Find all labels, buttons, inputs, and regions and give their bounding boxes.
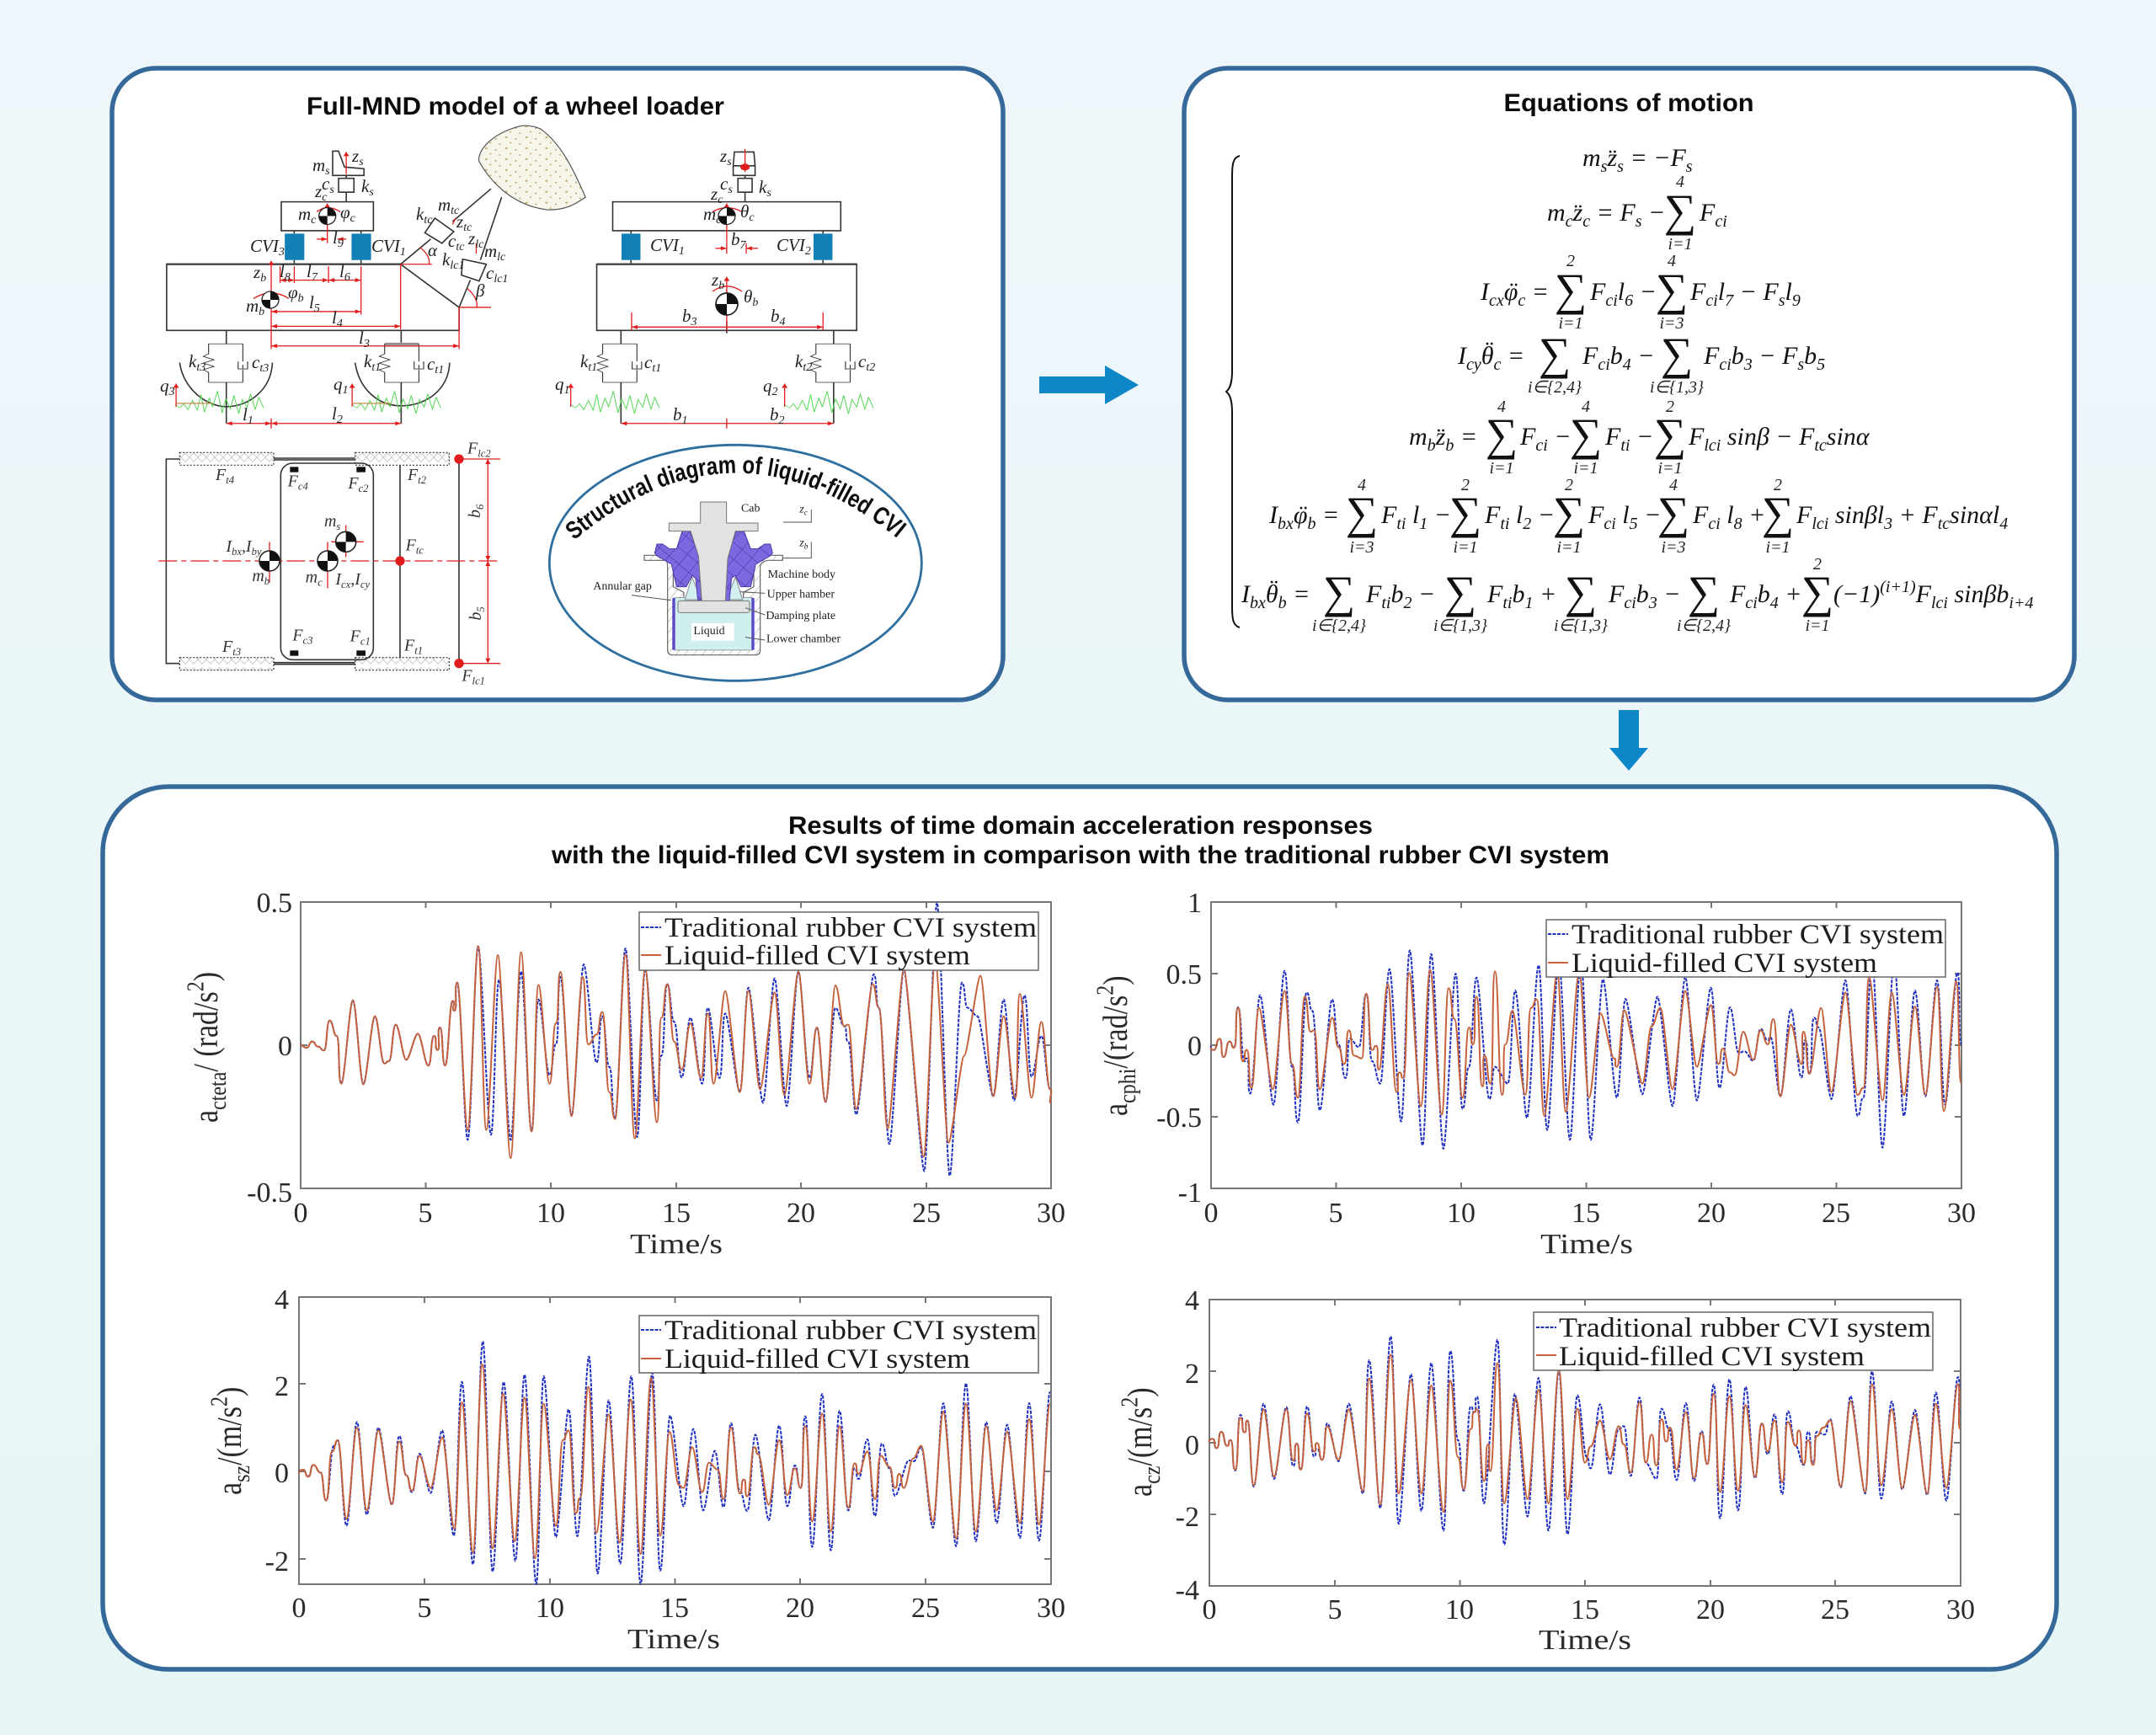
side view labels: φb: [288, 282, 304, 305]
axis tick labels: -4: [1176, 1575, 1199, 1606]
axis tick labels: 5: [1329, 1198, 1342, 1229]
plan view labels: Ft1: [403, 637, 423, 657]
axis tick labels: 0: [1203, 1594, 1216, 1626]
panel: full-MND model of a wheel loader: [109, 66, 1006, 702]
axis tick labels: [247, 888, 1065, 1260]
side view labels: kt1: [364, 351, 381, 374]
axis tick labels: 4: [1185, 1285, 1199, 1316]
rear view labels: ct2: [858, 351, 875, 374]
legend: [639, 912, 1038, 971]
side view labels: q1: [334, 374, 349, 397]
rear view labels: θc: [740, 201, 755, 224]
axis tick labels: 0.5: [256, 888, 292, 919]
heading: equations panel title: Equations of motion: [1504, 89, 1753, 117]
plan view labels: Ft4: [215, 466, 235, 486]
axis tick labels: 0: [1185, 1430, 1199, 1461]
equation system: ∑: [1801, 567, 1833, 617]
equation system: 4: [1676, 173, 1684, 191]
equation system: Icxφ¨c =: [1480, 278, 1549, 310]
rear view labels: q1: [555, 374, 569, 397]
axis tick labels: -0.5: [1156, 1102, 1202, 1134]
plan view labels: [215, 439, 491, 686]
axis tick labels: 0: [278, 1031, 292, 1062]
axes: [301, 902, 1051, 1188]
equation system: [1241, 144, 2033, 635]
CVI housing: [644, 555, 782, 655]
rear view labels: cs: [720, 174, 733, 196]
equation system: ∑: [1688, 567, 1720, 617]
equation system: mbz̈b =: [1409, 423, 1477, 455]
equation system: i=3: [1349, 538, 1374, 557]
side view labels: l4: [332, 307, 343, 330]
axis tick labels: 30: [1037, 1198, 1065, 1229]
axis tick labels: 15: [662, 1198, 691, 1229]
side view labels: zc: [314, 181, 328, 204]
side view labels: mb: [246, 296, 264, 318]
equation system: ∑: [1553, 488, 1585, 538]
axis tick labels: 10: [536, 1593, 564, 1624]
equation system: Ftib2 −: [1365, 580, 1435, 612]
equation system: Fti −: [1604, 423, 1653, 455]
plan view labels: mb: [252, 567, 270, 587]
panel: equations of motion: [1184, 68, 2074, 700]
equation system: 4: [1358, 476, 1366, 494]
rear view labels: b1: [673, 404, 687, 427]
CVI labels: Lower chamber: [766, 633, 841, 645]
axes: [1211, 902, 1961, 1188]
axis tick labels: 30: [1946, 1594, 1975, 1626]
equation system: (−1)(i+1)Flci sinβbi+4: [1833, 578, 2033, 612]
CVI labels: Cab: [741, 502, 760, 515]
equation system: msz̈s = −Fs: [1582, 144, 1693, 176]
axis tick labels: 15: [1571, 1594, 1599, 1626]
axis tick labels: 25: [1822, 1198, 1850, 1229]
axis tick labels: 0: [275, 1458, 289, 1489]
equation system: ∑: [1449, 488, 1481, 538]
chart: seat vertical acceleration: [205, 1284, 1065, 1655]
equation system: ∑: [1323, 567, 1355, 617]
axis tick labels: 0: [293, 1198, 308, 1229]
side view labels: l9: [333, 227, 344, 250]
rear view labels: kt1: [580, 351, 597, 374]
data lines: [299, 1342, 1050, 1584]
axis tick labels: Time/s: [630, 1229, 723, 1260]
axis tick labels: 10: [1447, 1198, 1476, 1229]
equation system: ∑: [1565, 567, 1597, 617]
legend: Traditional rubber CVI system: [1559, 1313, 1931, 1343]
side view labels: l8: [280, 261, 291, 284]
axis tick labels: 4: [275, 1284, 289, 1316]
equation system: Fcil6 −: [1589, 278, 1657, 310]
equation system: mcz̈c = Fs −: [1547, 199, 1665, 231]
equation system: 2: [1813, 555, 1822, 574]
rear view labels: b7: [731, 229, 746, 252]
equation system: Fci l5 −: [1588, 501, 1661, 533]
panel: results of time domain acceleration responses: [103, 787, 2057, 1669]
plan view labels: Fc3: [291, 627, 313, 647]
heading: model panel title: Full-MND model of a wheel loader: [307, 93, 724, 120]
equation system: i∈{1,3}: [1433, 617, 1487, 635]
axis tick labels: -2: [265, 1546, 289, 1578]
data lines: [301, 903, 1051, 1176]
equation system: Fcib4 +: [1729, 580, 1802, 612]
CVI labels: Upper hamber: [767, 588, 835, 601]
rear view labels: mc: [703, 204, 722, 227]
diagram: side view of the wheel loader: [160, 125, 585, 429]
legend: Liquid-filled CVI system: [1572, 948, 1877, 979]
side view labels: ktc: [416, 204, 433, 227]
equation system: i∈{1,3}: [1650, 378, 1704, 397]
data lines: [1211, 950, 1961, 1149]
axis tick labels: 2: [1185, 1359, 1199, 1390]
axis tick labels: 0: [1204, 1198, 1218, 1229]
equation system: i=3: [1659, 314, 1684, 333]
equation system: i=1: [1556, 538, 1582, 557]
axis tick labels: [265, 1284, 1065, 1655]
plan view labels: Ft2: [407, 466, 427, 486]
plan view labels: mc: [306, 569, 323, 589]
equation system: ∑: [1444, 567, 1476, 617]
equation system: 2: [1566, 252, 1575, 270]
plan view labels: b5: [467, 606, 487, 621]
equation system: Fcib3 − Fsb5: [1703, 342, 1825, 374]
plan view labels: Ibx,Iby: [225, 537, 262, 558]
plan view labels: Ft3: [221, 638, 241, 658]
rear view labels: b4: [771, 306, 785, 328]
axis tick labels: Time/s: [1540, 1229, 1633, 1260]
axis tick labels: 20: [786, 1593, 814, 1624]
side view labels: mtc: [438, 195, 460, 217]
axis tick labels: [1176, 1285, 1975, 1656]
rear view labels: b2: [770, 404, 785, 427]
plan view labels: b6: [466, 504, 486, 518]
curved heading: Structural diagram of liquid-filled CVI: [566, 456, 907, 538]
plan view labels: Fc4: [287, 472, 309, 492]
equation system: Fcib4 −: [1582, 342, 1655, 374]
equation system: i=1: [1668, 235, 1693, 254]
side view labels: ctc: [448, 231, 465, 254]
legend: [1534, 1312, 1933, 1372]
legend: Traditional rubber CVI system: [1572, 920, 1944, 950]
equation system: ∑: [1486, 409, 1518, 460]
axis tick labels: Time/s: [627, 1624, 720, 1655]
side view labels: klc1: [442, 249, 464, 272]
equation system: i=1: [1765, 538, 1790, 557]
side view labels: zlc: [467, 228, 484, 251]
equation system: 2: [1774, 476, 1782, 494]
side view labels: l5: [309, 292, 320, 315]
side view labels: CVI3: [250, 236, 285, 259]
axis tick labels: 5: [418, 1593, 431, 1624]
side view labels: zs: [351, 146, 364, 168]
axis tick labels: [1156, 888, 1976, 1260]
axis tick labels: -2: [1176, 1502, 1199, 1533]
equation system: 4: [1669, 476, 1678, 494]
heading: results panel title: with the liquid-filled CVI system in comparison with the traditional rubber CVI system: [551, 841, 1609, 869]
side view labels: clc1: [486, 263, 508, 286]
side view labels: q3: [160, 376, 175, 398]
axis tick labels: 30: [1037, 1593, 1065, 1624]
axis tick labels: 20: [1697, 1198, 1726, 1229]
side view labels: mc: [298, 204, 317, 227]
legend: Liquid-filled CVI system: [664, 941, 970, 971]
side view labels: kt3: [189, 351, 205, 374]
legend: Traditional rubber CVI system: [664, 913, 1037, 943]
rear view labels: CVI2: [776, 235, 811, 258]
side view labels: ct3: [252, 352, 269, 375]
equation system: i=1: [1573, 459, 1598, 478]
rear view labels: [555, 146, 875, 427]
equation system: i=1: [1453, 538, 1478, 557]
arrow: model to equations: [1039, 366, 1139, 404]
equation system: 2: [1461, 476, 1470, 494]
rear view linework: [571, 149, 873, 429]
CVI labels: Annular gap: [593, 580, 652, 593]
equation system: Ibxφ¨b =: [1268, 501, 1339, 533]
chart: cab roll angular acceleration: [1091, 888, 1976, 1260]
chart: cab vertical acceleration: [1115, 1285, 1975, 1656]
axis tick labels: -0.5: [247, 1177, 292, 1209]
equation system: ∑: [1661, 328, 1693, 379]
y axis label: asz/(m/s2): [205, 1387, 254, 1495]
equation system: Fci −: [1519, 423, 1572, 455]
heading: results panel title: [551, 812, 1609, 869]
axis tick labels: 10: [1445, 1594, 1474, 1626]
equation system: Fci: [1699, 199, 1727, 231]
legend: Liquid-filled CVI system: [1559, 1342, 1865, 1372]
axis tick labels: 15: [1572, 1198, 1600, 1229]
left brace: [1226, 156, 1240, 627]
rear view labels: q2: [763, 376, 778, 398]
axis tick labels: 25: [911, 1593, 940, 1624]
plan view labels: Fc1: [350, 627, 371, 648]
side view labels: l2: [332, 403, 343, 426]
equation system: i=1: [1489, 459, 1514, 478]
liquid chamber: [674, 598, 753, 650]
side view labels: ms: [312, 155, 330, 178]
plan view labels: ms: [324, 512, 340, 532]
rear view labels: zb: [711, 270, 724, 292]
side view labels: CVI1: [371, 236, 406, 259]
equation system: i=1: [1657, 459, 1683, 478]
diagram: rear view of the wheel loader: [555, 146, 875, 429]
equation system: 2: [1565, 476, 1573, 494]
axis tick labels: 0.5: [1166, 959, 1202, 990]
equation system: Icyθ¨c =: [1457, 337, 1524, 374]
y axis label: acphi/(rad/s2): [1091, 975, 1140, 1116]
equation system: ∑: [1539, 328, 1571, 379]
axis tick labels: 0: [291, 1593, 307, 1624]
equation system: i=1: [1805, 617, 1830, 635]
cab mount: [669, 502, 758, 601]
legend: [639, 1316, 1038, 1375]
CVI labels: Damping plate: [766, 610, 835, 622]
equation system: Flci sinβl3 + Ftcsinαl4: [1796, 501, 2008, 533]
side view labels: ct1: [427, 354, 444, 376]
axis tick labels: 1: [1187, 888, 1202, 919]
equation system: ∑: [1555, 264, 1587, 315]
equation system: i=1: [1558, 314, 1583, 333]
equation system: i∈{2,4}: [1677, 617, 1731, 635]
side view labels: φc: [340, 202, 356, 225]
axis tick labels: 15: [660, 1593, 689, 1624]
equation system: 4: [1668, 252, 1676, 270]
equation system: ∑: [1654, 409, 1686, 460]
axis tick labels: Time/s: [1539, 1625, 1631, 1656]
axes: [1209, 1300, 1961, 1586]
equation system: ∑: [1346, 488, 1378, 538]
CVI labels: [593, 502, 841, 645]
rear view labels: b3: [682, 306, 697, 328]
axis tick labels: 20: [1696, 1594, 1725, 1626]
side view labels: [160, 146, 508, 427]
rear view labels: ct1: [644, 352, 661, 375]
equation system: i∈{2,4}: [1312, 617, 1366, 635]
CVI labels: Liquid: [693, 625, 725, 638]
side view labels: l6: [339, 261, 350, 284]
rear view labels: zc: [710, 184, 723, 206]
side view labels: α: [428, 240, 438, 260]
y axis label: acteta/ (rad/s2): [181, 972, 231, 1123]
damping plate: [678, 601, 750, 612]
axis tick labels: 5: [418, 1198, 433, 1229]
equation system: ∑: [1656, 264, 1688, 315]
heading: results panel title: Results of time domain acceleration responses: [788, 812, 1373, 840]
axis tick labels: 30: [1947, 1198, 1976, 1229]
side view linework: [167, 125, 585, 429]
rear view labels: θb: [744, 286, 758, 309]
equation system: Flci sinβ − Ftcsinα: [1688, 423, 1870, 455]
plan view labels: Ftc: [405, 536, 424, 556]
rear view labels: CVI1: [650, 235, 685, 258]
legend: [1546, 920, 1945, 979]
side view labels: ztc: [456, 211, 472, 234]
diagram: plan view of forces and masses: [158, 439, 500, 686]
equation system: Fcil7 − Fsl9: [1689, 278, 1801, 310]
equation system: Fci l8 +: [1692, 501, 1765, 533]
equation system: Ibxθ¨b =: [1241, 575, 1310, 612]
axis tick labels: 25: [912, 1198, 941, 1229]
side view labels: l3: [359, 328, 370, 350]
rear view labels: kt2: [795, 351, 812, 374]
axis tick labels: 2: [275, 1371, 289, 1402]
equation system: i∈{2,4}: [1528, 378, 1582, 397]
equation system: ∑: [1570, 409, 1602, 460]
axes: [299, 1297, 1051, 1584]
equation system: 4: [1497, 398, 1506, 416]
side view labels: ks: [361, 176, 374, 199]
side view labels: cs: [322, 174, 334, 196]
axis tick labels: -1: [1178, 1177, 1202, 1209]
side view labels: zb: [253, 262, 266, 285]
equation system: ∑: [1657, 488, 1689, 538]
diagram: structural diagram of liquid-filled CVI: [547, 443, 923, 682]
equation system: Ftib1 +: [1486, 580, 1556, 612]
data lines: [1209, 1337, 1961, 1545]
equation system: i∈{1,3}: [1554, 617, 1608, 635]
side view labels: l1: [243, 404, 253, 427]
plan view labels: Flc2: [467, 439, 491, 459]
axis tick labels: 5: [1327, 1594, 1342, 1626]
equation system: ∑: [1664, 185, 1696, 236]
rubber body right: [725, 531, 772, 601]
rear view labels: zs: [719, 146, 732, 168]
plan view labels: Flc1: [461, 666, 485, 686]
legend: Liquid-filled CVI system: [664, 1344, 970, 1375]
axis tick labels: 10: [536, 1198, 565, 1229]
arrow: equations to results: [1609, 710, 1648, 771]
side view labels: mlc: [484, 241, 506, 264]
axis tick labels: 20: [787, 1198, 815, 1229]
CVI labels: zc: [798, 503, 808, 517]
equation system: ∑: [1762, 488, 1794, 538]
equation system: Fcib3 −: [1608, 580, 1681, 612]
equation system: Fti l2 −: [1484, 501, 1555, 533]
CVI labels: Machine body: [768, 569, 835, 581]
chart: cab pitch angular acceleration: [181, 888, 1065, 1260]
legend: Traditional rubber CVI system: [664, 1316, 1037, 1346]
axis tick labels: 25: [1821, 1594, 1849, 1626]
y axis label: acz/(m/s2): [1115, 1387, 1165, 1497]
axis tick labels: 0: [1187, 1031, 1202, 1062]
rubber body left: [654, 531, 702, 601]
rear view labels: ks: [759, 177, 771, 200]
equation system: 4: [1582, 398, 1590, 416]
plan view labels: Fc2: [347, 474, 369, 494]
side view labels: l7: [307, 261, 318, 284]
equation system: Fti l1 −: [1380, 501, 1451, 533]
plan view labels: Icx,Icy: [334, 570, 371, 590]
CVI labels: zb: [798, 537, 808, 551]
equation system: i=3: [1661, 538, 1686, 557]
equation system: 2: [1666, 398, 1674, 416]
side view labels: β: [475, 280, 485, 301]
